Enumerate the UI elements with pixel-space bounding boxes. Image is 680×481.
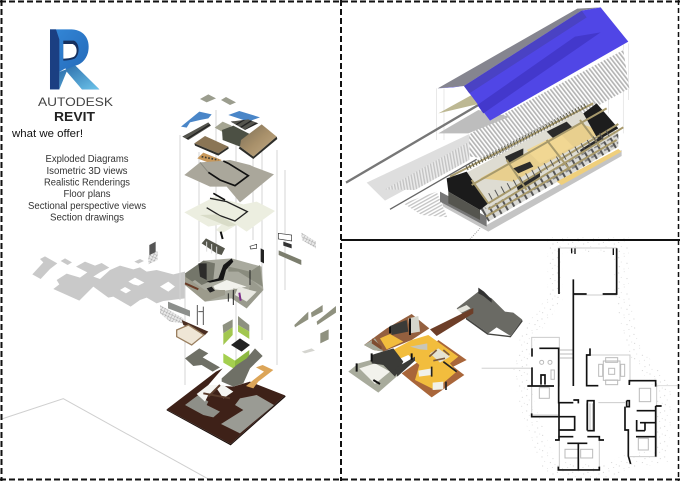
element: black walls bbox=[527, 248, 662, 470]
vertical projection lines bbox=[180, 110, 285, 385]
element: blue roof bbox=[438, 7, 628, 121]
ground outline and grey site footprint bbox=[2, 256, 210, 480]
element: grey roof slab bbox=[215, 122, 232, 132]
element: foundation grey rooms bbox=[185, 395, 220, 417]
panel: exploded roof isometric bbox=[346, 7, 629, 239]
text block: offer list: Realistic Renderings bbox=[44, 178, 130, 188]
panel: floor plan drawing bbox=[510, 245, 680, 473]
element: black gable end bbox=[447, 172, 488, 210]
text block: offer list bbox=[28, 154, 146, 224]
element: tan sloped roof bbox=[240, 124, 277, 157]
text block: offer list: Section drawings bbox=[50, 212, 124, 224]
element: white partition walls bbox=[418, 368, 443, 390]
text block: offer list: Exploded Diagrams bbox=[46, 154, 128, 165]
element: grey bedroom wing bbox=[348, 357, 412, 393]
element: dark green roof bbox=[222, 126, 252, 147]
element: yellow rooms bbox=[390, 335, 458, 390]
element: furniture bbox=[430, 348, 450, 363]
projection lines bbox=[437, 43, 629, 140]
element: tan soffit triangle bbox=[438, 95, 478, 113]
element: left louvers bbox=[385, 142, 469, 190]
element: right wall fragments bbox=[294, 305, 336, 353]
upper exploded layers bbox=[148, 94, 316, 265]
element: small tan roof bbox=[194, 136, 228, 153]
element: small wall fragment bbox=[261, 248, 264, 263]
element: black rear wall bbox=[583, 103, 618, 140]
element: blue roof panel left bbox=[181, 112, 212, 128]
text: REVIT: REVIT bbox=[54, 110, 95, 124]
text block: offer list: Isometric 3D views bbox=[46, 166, 128, 177]
element: yellow timber floor bbox=[480, 123, 603, 182]
element: dark walls bbox=[372, 320, 415, 377]
element: grey floor slab bbox=[184, 160, 274, 202]
text block: offer list: Floor plans bbox=[64, 189, 110, 200]
element: grey garage wing bbox=[457, 292, 522, 336]
element: timber beams bbox=[450, 103, 623, 217]
element: interior furniture bbox=[539, 350, 651, 458]
element: dark battens right bbox=[231, 119, 258, 130]
element: panel left of building bbox=[149, 242, 156, 257]
text: AUTODESK: AUTODESK bbox=[38, 97, 113, 109]
element: blue roof panel right bbox=[228, 111, 260, 122]
element: kitchen fragment bbox=[160, 302, 208, 345]
central floor with walls bbox=[185, 258, 263, 308]
element: dark openings bbox=[505, 122, 603, 192]
element: dark roof battens left bbox=[182, 122, 211, 140]
element: building deck bbox=[440, 150, 622, 232]
icon: Revit R logo bbox=[50, 29, 99, 89]
panel: Revit logo and offer list bbox=[11, 29, 146, 224]
text block: offer list: Sectional perspective views bbox=[28, 201, 146, 212]
element: grey ground floor slabs bbox=[185, 348, 220, 372]
panel: isometric floor plan bbox=[348, 288, 530, 397]
element: building upper body bbox=[450, 112, 618, 208]
element: connecting corridor bbox=[430, 308, 473, 336]
element: brown terrace bbox=[402, 340, 467, 397]
element: yellow deck strip bbox=[557, 149, 622, 185]
element: dark foundation bbox=[167, 368, 285, 444]
element: grey translucent soffit bbox=[438, 110, 510, 133]
element: upper louvers bbox=[468, 50, 629, 160]
chart: exploded building diagram bbox=[148, 94, 336, 445]
element: stippled surrounds bbox=[520, 245, 665, 473]
lower exploded layers bbox=[160, 302, 336, 445]
element: small roof caps bbox=[200, 94, 236, 105]
element: long beams bbox=[346, 105, 478, 183]
element: faint section line bbox=[482, 366, 530, 370]
element: building lower walls bbox=[480, 132, 618, 222]
element: wall panels right bbox=[278, 233, 292, 241]
element: orange deck bbox=[246, 365, 273, 388]
element: left translucent wall bbox=[367, 134, 469, 201]
element: corner stipple bbox=[470, 228, 480, 239]
element: back bedroom bbox=[364, 314, 429, 352]
element: green toilet walls bbox=[223, 316, 250, 369]
heading: what we offer: what we offer! bbox=[11, 128, 83, 140]
element: faint outlines bbox=[510, 248, 680, 470]
element: upper walls bbox=[202, 238, 225, 255]
element: rafters bbox=[467, 105, 587, 168]
element: timber deck bbox=[197, 153, 222, 165]
element: cream floor slab bbox=[184, 197, 275, 233]
